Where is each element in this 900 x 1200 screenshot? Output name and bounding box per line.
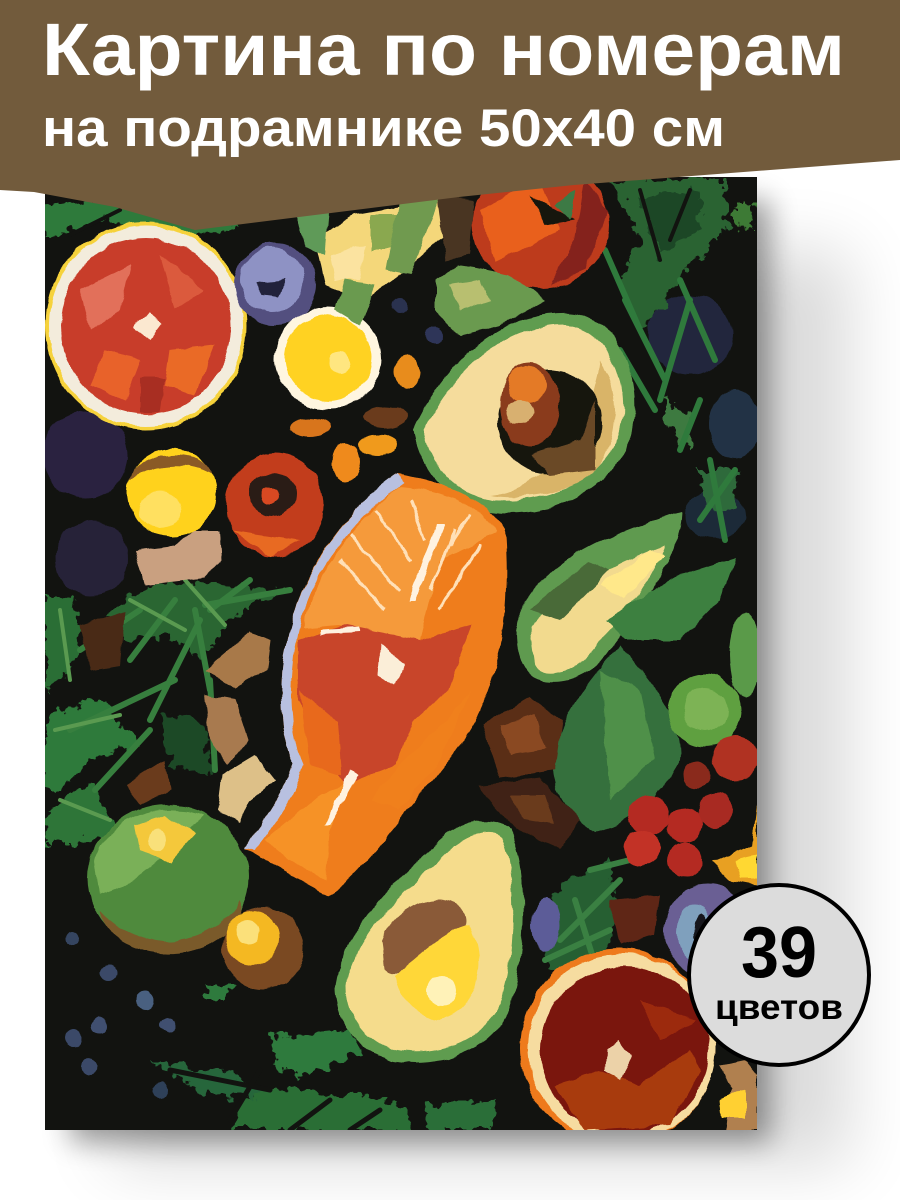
dark berries and leaves <box>42 295 761 1098</box>
food items <box>45 160 761 1145</box>
bottom avocado <box>335 821 523 1063</box>
spinach leaves <box>552 558 761 832</box>
label: цветов <box>715 988 843 1027</box>
red cherries <box>624 735 758 877</box>
green apple <box>88 804 248 953</box>
painting: canvas with food <box>42 160 761 1145</box>
yellow flower pieces <box>610 805 757 945</box>
pomegranate <box>226 453 324 557</box>
leafy greens <box>45 180 752 1130</box>
tomato <box>472 184 610 289</box>
small avocado slice <box>435 265 545 335</box>
yellow cauliflower <box>295 195 475 325</box>
blueberry <box>234 243 316 325</box>
subtitle: на подрамнике 50х40 см <box>42 99 725 158</box>
canvas shadow <box>70 200 850 1165</box>
yellow fruit <box>128 449 216 537</box>
ginger and nuts left <box>80 530 275 822</box>
ginger root bottom right <box>720 1060 757 1130</box>
large avocado <box>413 313 635 513</box>
small round fruit <box>222 907 304 989</box>
header ribbon <box>0 0 900 230</box>
lemon slice <box>275 307 381 409</box>
grapefruit <box>45 222 247 430</box>
brown nut cluster <box>478 697 580 850</box>
nuts and orange seeds <box>290 356 420 482</box>
badge: 39 colours <box>689 885 869 1065</box>
title: Картина по номерам <box>42 8 845 91</box>
sliced avocado with leaves <box>517 512 682 682</box>
feathery leaf strokes <box>55 190 735 1130</box>
purple onion <box>530 883 734 972</box>
salmon steak <box>245 474 507 895</box>
number: 39 <box>741 913 817 993</box>
blood orange <box>520 949 716 1145</box>
